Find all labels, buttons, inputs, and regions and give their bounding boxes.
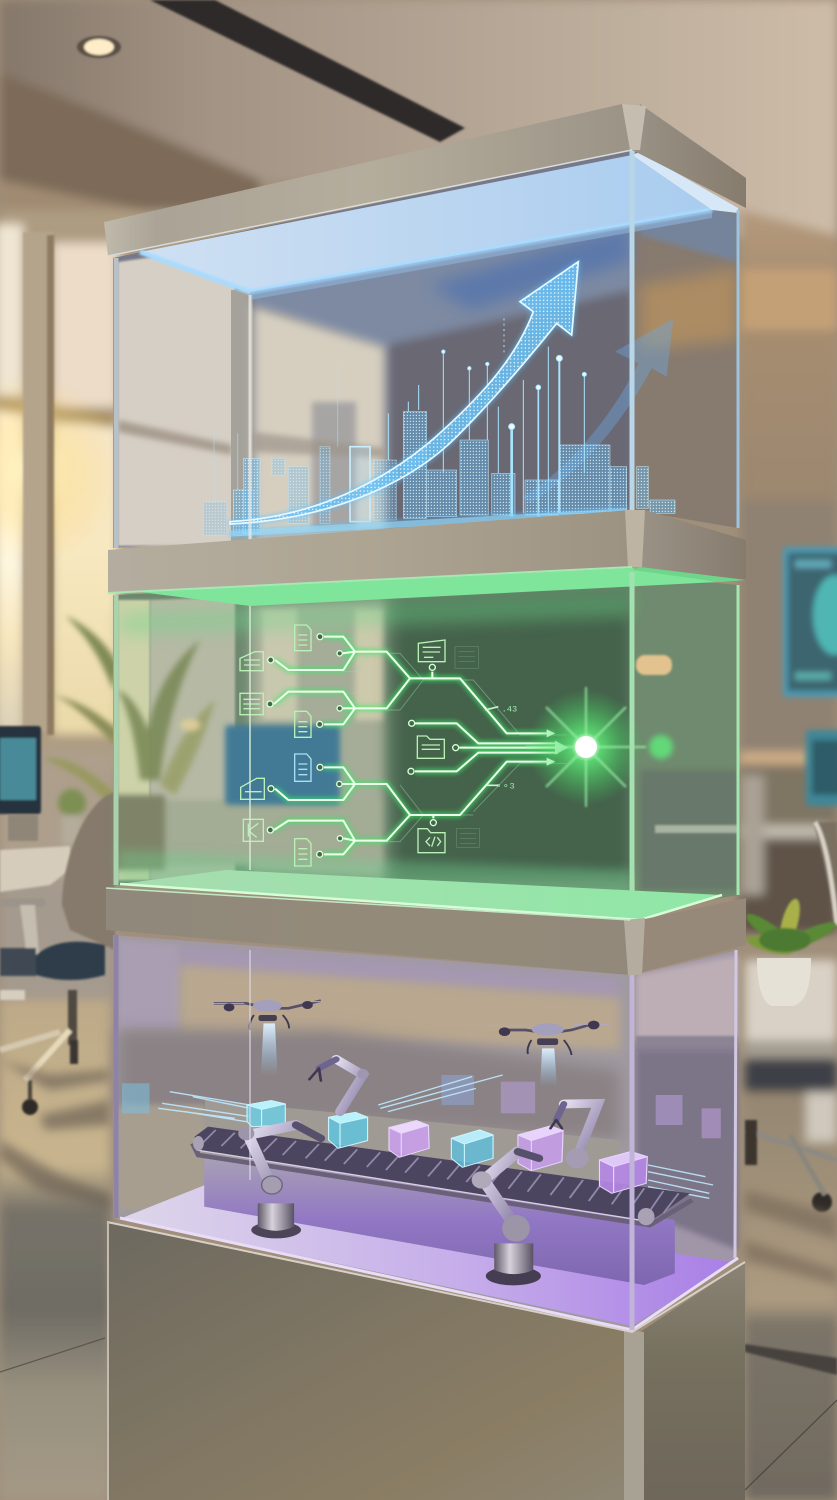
glass back view middle tier (113, 572, 738, 912)
base plinth (107, 1222, 745, 1500)
top lid (104, 104, 746, 256)
panel: top tier, growth (113, 150, 738, 548)
ceiling beam (150, 0, 465, 142)
arrowheads (547, 729, 568, 766)
chair back right (813, 822, 837, 930)
wall screen right (783, 547, 837, 697)
glass edges top tier (116, 150, 738, 548)
robot arm front left (238, 1125, 321, 1238)
shelf between top and middle tiers (108, 510, 746, 593)
floor shadows right (745, 1190, 837, 1285)
drone right (485, 1021, 610, 1087)
robot arm back right (550, 1103, 598, 1168)
faint echo documents (455, 647, 479, 847)
conveyor belt (193, 1127, 692, 1225)
green glowing ceiling (140, 568, 718, 606)
data labels: ⚬⚬3 (495, 782, 515, 792)
growth arrow (230, 262, 578, 524)
potted plant left (42, 615, 118, 810)
main glowing traces (274, 637, 563, 854)
blue glowing ceiling (140, 152, 738, 300)
monitor right (806, 730, 837, 806)
conveyor body (204, 1153, 675, 1285)
floor tile seam (0, 1338, 105, 1372)
display case (104, 104, 746, 1500)
robot arm front right (472, 1152, 541, 1285)
floor seam right (745, 1400, 837, 1490)
plinth floor edge right (745, 1344, 837, 1375)
hologram: city skyline and growth arrow (203, 262, 675, 537)
small plant left (58, 789, 86, 845)
shelf between middle and bottom tiers (106, 888, 746, 975)
plant seen through glass (118, 640, 215, 795)
green light burst (526, 687, 646, 807)
floor shadows (0, 1060, 110, 1210)
speed lines (158, 1075, 713, 1198)
glass back view bottom tier (113, 935, 738, 1330)
green glowing floor (120, 870, 722, 920)
chair back seen through glass (113, 795, 165, 870)
office chair (0, 792, 115, 1115)
ceiling light (77, 36, 121, 58)
floor glow (230, 508, 627, 537)
document icons (240, 625, 445, 866)
data cubes (247, 1101, 647, 1193)
ghost reflected arrow (523, 318, 673, 503)
faint reflected cubes (122, 1075, 721, 1138)
data labels (495, 704, 517, 792)
glass edges bottom tier (116, 935, 736, 1330)
panel: middle tier, data flow (113, 568, 738, 920)
faint echo paths (283, 638, 567, 842)
chair frame right (815, 822, 837, 925)
desk left (0, 846, 72, 892)
sun glare (0, 375, 123, 565)
data spires (214, 318, 586, 517)
purple glowing floor (120, 1185, 738, 1330)
glass back view top tier (113, 150, 738, 548)
hologram: data network converging into light (240, 625, 568, 866)
window frame (23, 232, 54, 735)
robot arm back left (309, 1059, 369, 1112)
skyline buildings (203, 412, 675, 535)
plant and pot right (743, 897, 837, 1006)
panel: bottom tier, automation (113, 935, 738, 1330)
glass edges middle tier (116, 572, 738, 910)
monitor left (0, 726, 41, 841)
chair legs right (745, 1120, 837, 1212)
data labels: .43 (502, 704, 517, 714)
drone left (212, 1000, 323, 1077)
node circles (267, 634, 459, 857)
reflected green light (649, 735, 673, 759)
hologram: conveyor, robots and drones (122, 1000, 721, 1285)
